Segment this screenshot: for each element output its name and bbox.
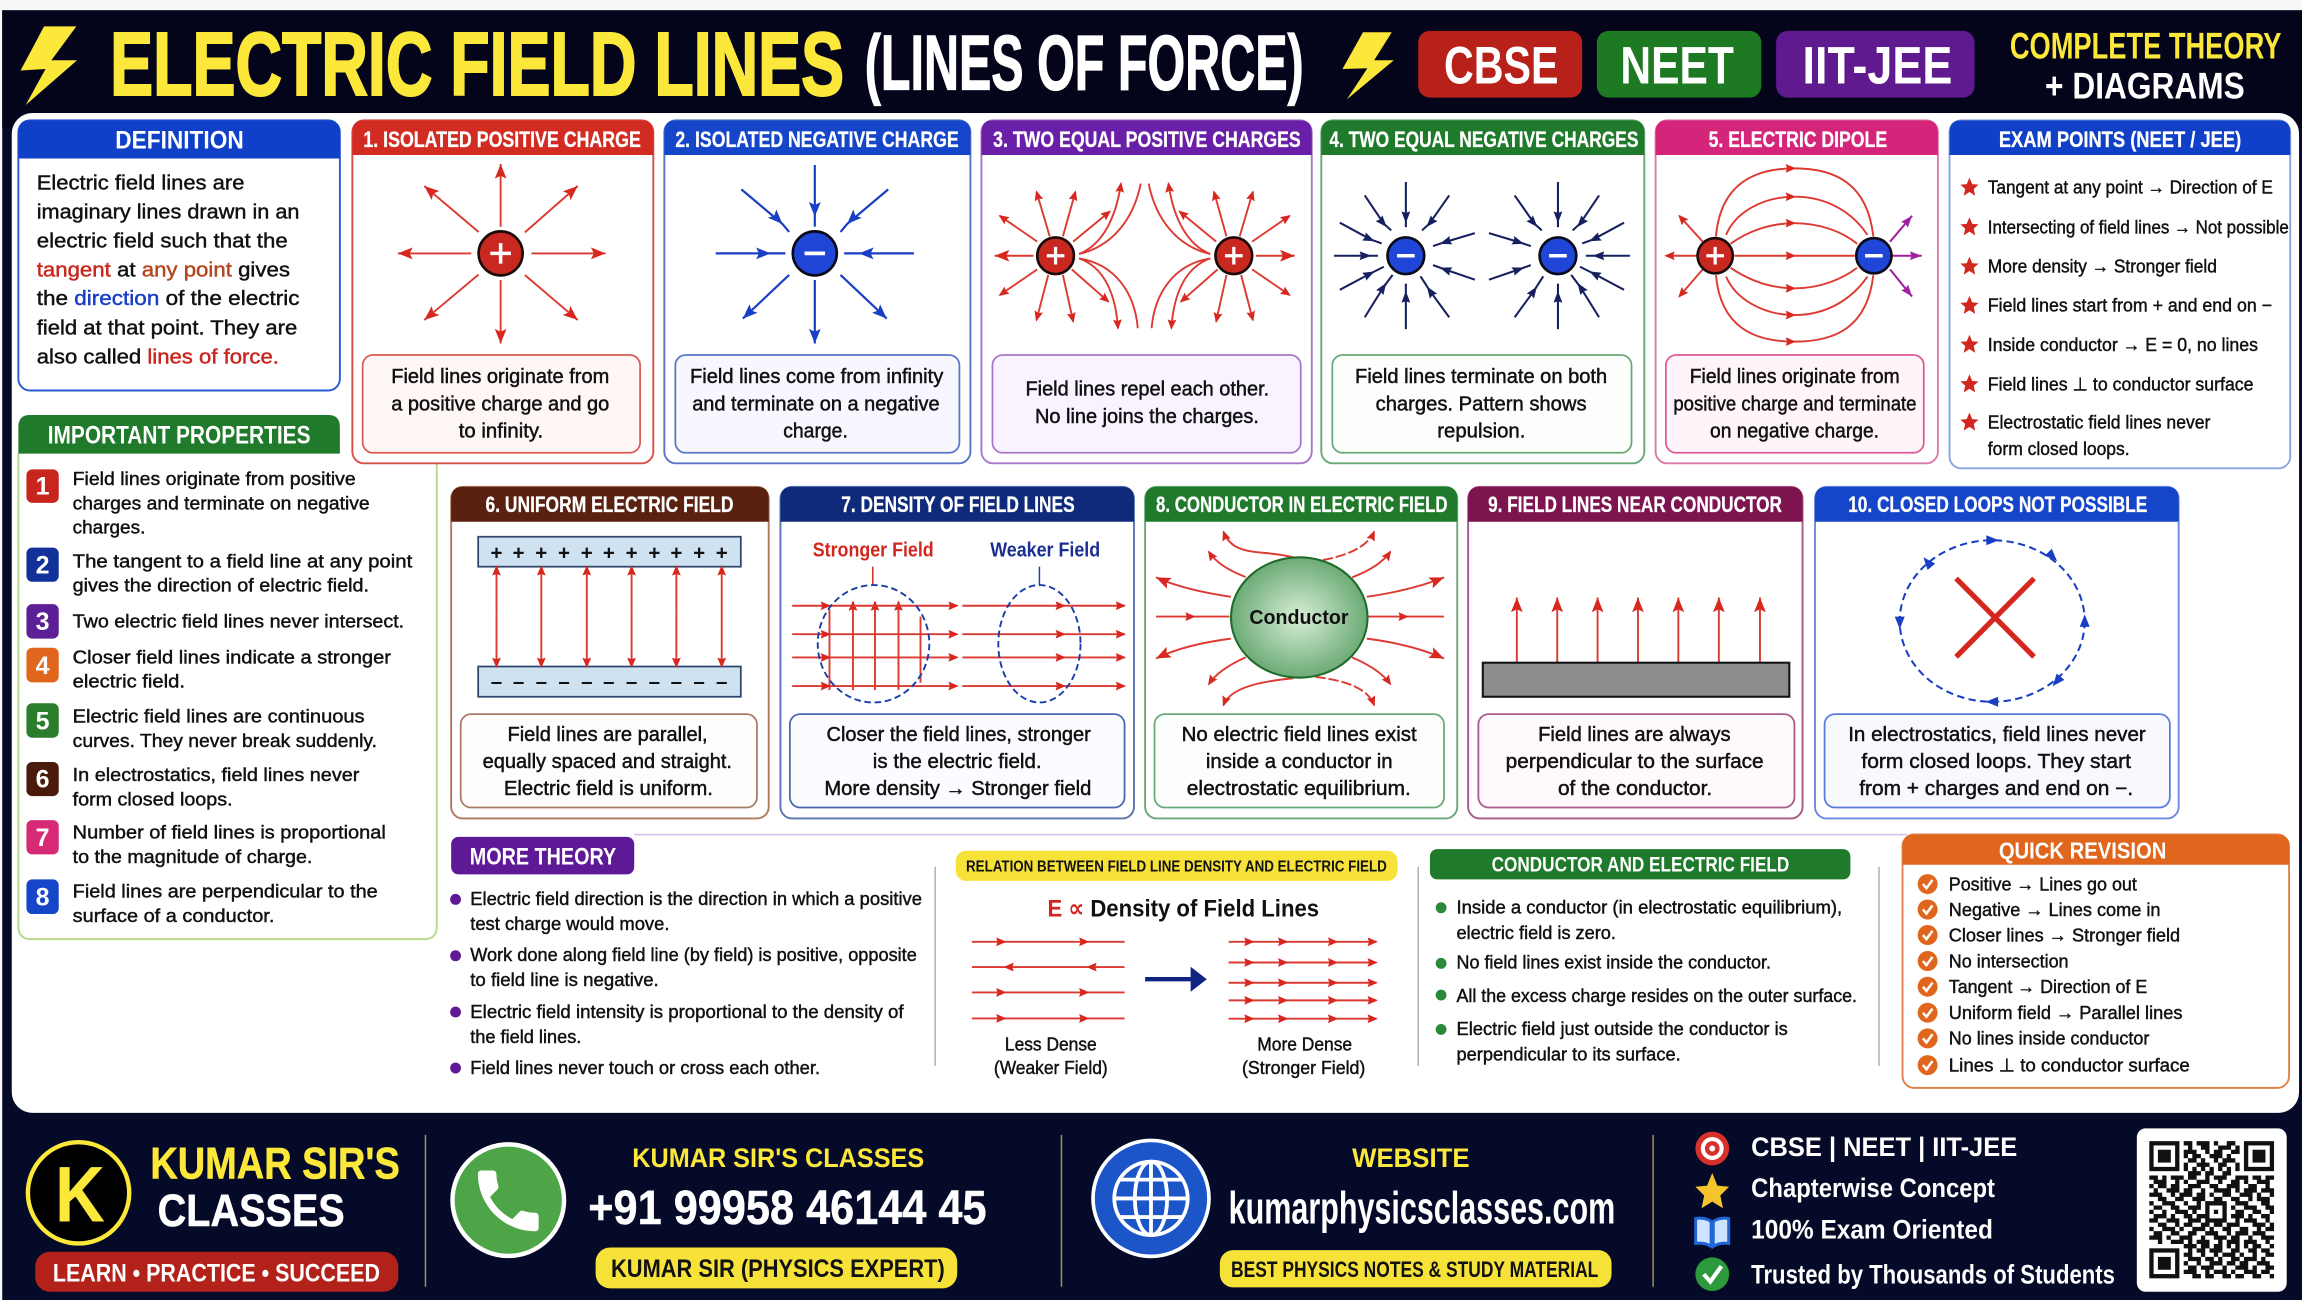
card 7: density of field lines: 7. DENSITY OF FIELD LINES	[841, 492, 1075, 517]
footer: website block: kumarphysicsclasses.com	[1229, 1183, 1615, 1234]
diagram: dipole field	[1666, 168, 1922, 342]
caption	[1332, 355, 1632, 453]
revision list: Closer lines → Stronger field	[1949, 924, 2180, 945]
property list: Electric field lines are continuous	[73, 705, 365, 726]
main white panel	[12, 113, 2299, 1113]
caption: of the conductor.	[1558, 778, 1712, 800]
badge: CBSE: CBSE	[1444, 36, 1559, 95]
card 4: two equal negative charges: 4. TWO EQUAL NEGATIVE CHARGES	[1329, 127, 1638, 152]
diagram: crossed loop	[1895, 535, 2090, 707]
caption: perpendicular to the surface	[1506, 751, 1764, 773]
property list: surface of a conductor.	[73, 905, 274, 926]
caption	[1666, 355, 1924, 453]
card 3: two equal positive charges	[981, 120, 1312, 463]
tagline: + DIAGRAMS	[2045, 65, 2245, 106]
icon: lightning bolt left	[21, 26, 77, 105]
caption	[675, 355, 959, 453]
card 1: isolated positive charge	[352, 120, 653, 463]
icon: K logo: K	[55, 1150, 105, 1239]
panel: exam points: EXAM POINTS (NEET / JEE)	[1999, 127, 2241, 152]
card 8: conductor in electric field: 8. CONDUCTOR IN ELECTRIC FIELD	[1156, 492, 1448, 517]
revision list	[1949, 873, 2190, 1075]
badge: IIT-JEE: IIT-JEE	[1803, 36, 1952, 95]
arrow: less to more dense	[1145, 967, 1207, 992]
panel: quick revision	[1903, 834, 2289, 1088]
panel: definition	[18, 120, 340, 391]
caption	[1155, 714, 1444, 807]
expert pill: KUMAR SIR (PHYSICS EXPERT)	[611, 1255, 945, 1283]
theory text: Electric field intensity is proportional to the density of	[470, 1001, 905, 1022]
exam point list: Field lines start from + and end on −	[1988, 295, 2272, 316]
panel: more theory: MORE THEORY	[470, 843, 616, 870]
card 8: conductor in electric field	[1145, 487, 1457, 818]
caption	[1825, 714, 2170, 807]
theory text: test charge would move.	[470, 913, 669, 934]
caption: Field lines come from infinity	[690, 366, 943, 388]
caption: is the electric field.	[873, 751, 1042, 773]
exam point list: Field lines ⊥ to conductor surface	[1988, 374, 2254, 395]
footer: phone block: KUMAR SIR'S CLASSES	[632, 1142, 924, 1173]
expert pill	[596, 1247, 957, 1288]
diagram: radial outward field	[398, 164, 606, 344]
icons: check marks	[1918, 874, 1938, 1075]
caption: In electrostatics, field lines never	[1848, 724, 2146, 746]
definition text: Electric field lines are	[37, 171, 244, 194]
diagram: converging negative charges	[1334, 182, 1630, 329]
feature text: Chapterwise Concept	[1751, 1172, 1995, 1203]
panel: more theory	[450, 835, 1907, 1078]
definition text: tangent at any point gives	[37, 259, 290, 282]
card 6: uniform electric field: 6. UNIFORM ELECTRIC FIELD	[486, 492, 733, 517]
diagram: density comparison: Stronger Field	[813, 539, 934, 562]
card 4: two equal negative charges	[1321, 120, 1644, 463]
property list: to the magnitude of charge.	[73, 846, 312, 867]
property list: Field lines originate from positive	[73, 468, 356, 489]
number badges: 7	[36, 824, 50, 852]
property list: electric field.	[73, 670, 185, 691]
conductor text: Inside a conductor (in electrostatic equilibrium),	[1457, 896, 1842, 917]
property list: Field lines are perpendicular to the	[73, 881, 378, 902]
diagram: repelling positive charges	[995, 184, 1295, 328]
caption: on negative charge.	[1710, 420, 1879, 442]
card 3: two equal positive charges: 3. TWO EQUAL POSITIVE CHARGES	[993, 127, 1301, 152]
definition text: the direction of the electric	[37, 287, 300, 310]
caption: electrostatic equilibrium.	[1187, 778, 1411, 800]
panel: important properties	[18, 415, 437, 939]
footer: phone block: +91 99958 46144 45	[588, 1181, 987, 1235]
caption: Closer the field lines, stronger	[827, 724, 1091, 746]
panel: relation between density and field	[935, 851, 1879, 1078]
caption: Field lines originate from	[391, 366, 609, 388]
icon: K logo	[28, 1142, 129, 1243]
theory text: to field line is negative.	[470, 969, 659, 990]
number badges: 2	[36, 551, 50, 579]
density labels: (Stronger Field)	[1242, 1057, 1365, 1078]
property list: charges and terminate on negative	[73, 492, 370, 513]
badge: NEET: NEET	[1620, 36, 1734, 95]
caption: form closed loops. They start	[1861, 751, 2131, 773]
icon: check badge	[1695, 1257, 1729, 1291]
footer: feature list	[1695, 1131, 2115, 1291]
footer: website block	[1093, 1140, 1615, 1287]
title: ELECTRIC FIELD LINES	[110, 14, 844, 114]
diagram: more dense lines	[1229, 942, 1376, 1019]
density labels: Less Dense	[1005, 1034, 1097, 1055]
card 2: isolated negative charge: 2. ISOLATED NEGATIVE CHARGE	[675, 127, 959, 152]
diagram: density comparison	[792, 539, 1125, 702]
conductor text: All the excess charge resides on the outer surface.	[1457, 985, 1857, 1006]
footer: logo block	[28, 1139, 400, 1292]
icon: star	[1695, 1173, 1729, 1208]
caption: More density → Stronger field	[824, 778, 1091, 800]
conductor text: No field lines exist inside the conductor.	[1457, 951, 1771, 972]
number badges: 1	[36, 473, 50, 501]
property list: gives the direction of electric field.	[73, 575, 369, 596]
conductor text	[1457, 896, 1857, 1065]
theory text: the field lines.	[470, 1026, 581, 1047]
icon: target	[1695, 1132, 1729, 1165]
density labels	[994, 1034, 1365, 1078]
exam point list: form closed loops.	[1988, 438, 2130, 459]
footer: phone block	[452, 1142, 987, 1288]
caption: Field lines are parallel,	[508, 724, 708, 746]
card 9: field lines near conductor: 9. FIELD LINES NEAR CONDUCTOR	[1488, 492, 1782, 517]
number badges	[26, 469, 59, 914]
feature text: 100% Exam Oriented	[1751, 1213, 1993, 1244]
density labels: More Dense	[1257, 1034, 1352, 1055]
exam point list: Electrostatic field lines never	[1988, 411, 2210, 432]
diagram: less dense lines	[972, 942, 1125, 1018]
definition text: field at that point. They are	[37, 316, 297, 339]
card 10: closed loops not possible	[1815, 487, 2179, 818]
exam point list: More density → Stronger field	[1988, 256, 2217, 277]
slogan pill	[35, 1252, 398, 1292]
subtitle: (LINES OF FORCE)	[865, 21, 1304, 107]
QR code	[2137, 1128, 2287, 1292]
card 10: closed loops not possible: 10. CLOSED LOOPS NOT POSSIBLE	[1848, 492, 2147, 517]
revision list: Positive → Lines go out	[1949, 873, 2137, 894]
notes pill: BEST PHYSICS NOTES & STUDY MATERIAL	[1231, 1257, 1598, 1282]
property list: Number of field lines is proportional	[73, 821, 386, 842]
icon: book	[1696, 1218, 1729, 1246]
definition text: electric field such that the	[37, 229, 288, 252]
diagram: conductor sphere	[1156, 532, 1444, 705]
property list: Closer field lines indicate a stronger	[73, 647, 391, 668]
definition text: also called lines of force.	[37, 345, 279, 368]
card 5: electric dipole: 5. ELECTRIC DIPOLE	[1709, 127, 1887, 152]
property list: In electrostatics, field lines never	[73, 764, 359, 785]
caption: and terminate on a negative	[692, 394, 940, 416]
bullets	[450, 894, 461, 1073]
property list: charges.	[73, 516, 145, 537]
number badges: 6	[36, 766, 50, 794]
property list	[73, 468, 412, 926]
property list: curves. They never break suddenly.	[73, 730, 377, 751]
panel: important properties: IMPORTANT PROPERTIES	[48, 422, 311, 449]
revision list: Tangent → Direction of E	[1949, 976, 2147, 997]
notes pill	[1220, 1250, 1612, 1287]
icon: globe	[1093, 1140, 1209, 1256]
number badges: 8	[36, 884, 50, 912]
card 9: field lines near conductor	[1468, 487, 1803, 818]
panel: exam points	[1949, 120, 2290, 468]
revision list: No lines inside conductor	[1949, 1028, 2149, 1049]
theory text: Field lines never touch or cross each other.	[470, 1057, 820, 1078]
caption	[363, 355, 640, 453]
footer: logo block: CLASSES	[158, 1185, 345, 1236]
footer: logo block: KUMAR SIR'S	[150, 1139, 400, 1188]
footer: dividers	[425, 1135, 1653, 1287]
caption	[790, 714, 1125, 807]
icons: stars	[1960, 178, 1979, 431]
caption: a positive charge and go	[391, 394, 609, 416]
slogan pill: LEARN • PRACTICE • SUCCEED	[53, 1260, 380, 1288]
icon: phone	[452, 1144, 564, 1256]
caption: positive charge and terminate	[1673, 394, 1916, 416]
conductor text: perpendicular to its surface.	[1457, 1044, 1681, 1065]
diagram: parallel plates: +++++++++++	[491, 541, 728, 564]
card 1: isolated positive charge: 1. ISOLATED POSITIVE CHARGE	[363, 127, 641, 152]
diagram: conductor sphere: Conductor	[1249, 606, 1348, 629]
conductor text: electric field is zero.	[1457, 922, 1616, 943]
caption: charge.	[783, 420, 848, 442]
caption: to infinity.	[459, 420, 543, 442]
caption	[992, 355, 1301, 453]
revision list: Uniform field → Parallel lines	[1949, 1002, 2182, 1023]
conductor text: Electric field just outside the conductor is	[1457, 1018, 1788, 1039]
theory text	[470, 888, 922, 1078]
caption: Field lines are always	[1538, 724, 1731, 746]
definition text: imaginary lines drawn in an	[37, 200, 300, 223]
number badges: 5	[36, 707, 50, 735]
card 5: electric dipole	[1656, 120, 1938, 463]
exam point list: Inside conductor → E = 0, no lines	[1988, 334, 2258, 355]
diagram: parallel plates: –––––––––––	[491, 671, 727, 694]
panel: relation between density and field: RELATION BETWEEN FIELD LINE DENSITY AND ELECTRIC FIELD	[966, 859, 1387, 876]
theory text: Work done along field line (by field) is positive, opposite	[470, 944, 917, 965]
caption: inside a conductor in	[1206, 751, 1393, 773]
property list: Two electric field lines never intersect.	[73, 610, 404, 631]
diagram: radial inward field	[716, 165, 914, 344]
caption	[461, 714, 757, 807]
formula: E ∝ Density of Field Lines	[1047, 896, 1319, 923]
caption	[1478, 714, 1794, 807]
exam point list	[1988, 176, 2289, 459]
revision list: Lines ⊥ to conductor surface	[1949, 1054, 2190, 1075]
caption: No electric field lines exist	[1182, 724, 1417, 746]
caption: charges. Pattern shows	[1376, 394, 1587, 416]
revision list: Negative → Lines come in	[1949, 899, 2160, 920]
panel: conductor and electric field	[1430, 849, 1857, 1065]
diagram: perpendicular field lines	[1483, 598, 1789, 697]
header band	[2, 10, 2302, 128]
card 7: density of field lines	[780, 487, 1134, 818]
property list: The tangent to a field line at any point	[73, 551, 412, 572]
caption: repulsion.	[1437, 420, 1525, 442]
caption: No line joins the charges.	[1035, 406, 1259, 428]
feature text: CBSE | NEET | IIT-JEE	[1751, 1131, 2017, 1162]
density labels: (Weaker Field)	[994, 1057, 1108, 1078]
card 6: uniform electric field	[451, 487, 769, 818]
number badges: 3	[36, 608, 50, 636]
panel: conductor and electric field: CONDUCTOR AND ELECTRIC FIELD	[1492, 853, 1789, 877]
footer: website block: WEBSITE	[1352, 1142, 1470, 1173]
feature text: Trusted by Thousands of Students	[1751, 1258, 2115, 1289]
diagram: parallel plates	[478, 537, 741, 697]
icon: lightning bolt right	[1342, 32, 1394, 99]
property list: form closed loops.	[73, 788, 233, 809]
definition text	[37, 171, 300, 368]
feature text	[1751, 1131, 2115, 1289]
caption: Electric field is uniform.	[504, 778, 713, 800]
revision list: No intersection	[1949, 950, 2069, 971]
caption: from + charges and end on −.	[1859, 778, 2133, 800]
panel: quick revision: QUICK REVISION	[1999, 837, 2166, 863]
panel: definition: DEFINITION	[115, 127, 244, 154]
tagline	[2010, 25, 2281, 106]
bullets	[1436, 902, 1447, 1035]
diagram: density comparison: Weaker Field	[990, 539, 1100, 562]
card 2: isolated negative charge	[664, 120, 970, 463]
caption: Field lines repel each other.	[1025, 379, 1269, 401]
theory text: Electric field direction is the direction in which a positive	[470, 888, 922, 909]
caption: equally spaced and straight.	[483, 751, 732, 773]
exam point list: Tangent at any point → Direction of E	[1988, 176, 2273, 197]
caption: Field lines originate from	[1690, 366, 1900, 388]
caption: Field lines terminate on both	[1355, 366, 1607, 388]
number badges: 4	[36, 652, 50, 680]
